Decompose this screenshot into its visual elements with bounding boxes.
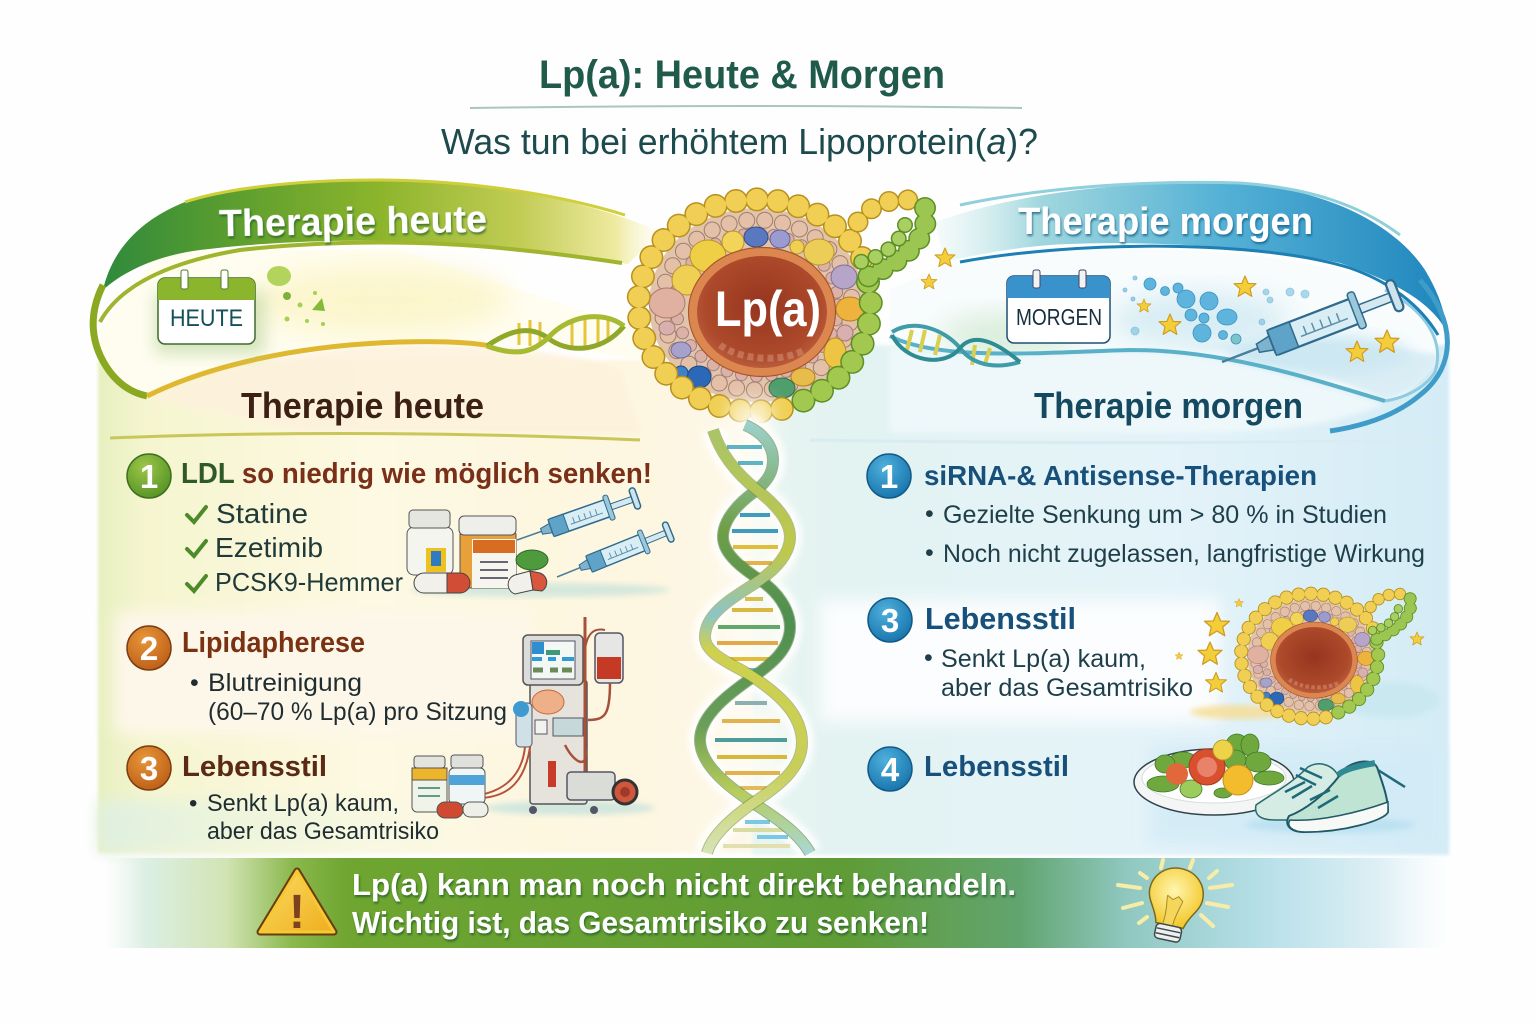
item 3 right: Lebensstil: • bbox=[924, 644, 933, 672]
item 1 right: siRNA: • bbox=[925, 539, 934, 567]
banner text bbox=[352, 867, 1016, 940]
item 3 left: Lebensstil bbox=[127, 746, 439, 845]
item 1 left: LDL senken: LDL so niedrig wie möglich senken! bbox=[181, 458, 652, 490]
banner: key message bbox=[105, 858, 1450, 948]
icon: warning triangle bbox=[260, 871, 334, 939]
item 1 right: siRNA: 1 bbox=[880, 458, 898, 495]
item 3 left: Lebensstil: • bbox=[189, 790, 197, 817]
list: medications bbox=[187, 498, 403, 597]
icon: apheresis machine bbox=[480, 617, 655, 815]
item 1 right: siRNA: Gezielte Senkung um > 80 % in Studien bbox=[943, 501, 1387, 529]
icon: mini Lp(a) particle with stars bbox=[1175, 594, 1440, 719]
item 2 left: Lipidapherese: Blutreinigung bbox=[208, 669, 362, 697]
item 1 left: LDL senken bbox=[127, 454, 652, 597]
item 1 right: siRNA bbox=[867, 454, 1425, 568]
item 1 right: siRNA: Noch nicht zugelassen, langfristige Wirkung bbox=[943, 540, 1425, 568]
headings: section titles: Therapie morgen bbox=[1034, 385, 1303, 426]
DNA helix bbox=[700, 425, 810, 853]
Lp(a) particle bbox=[638, 199, 926, 411]
icon: blue droplets bbox=[1123, 276, 1309, 344]
item 1 right: siRNA: • bbox=[925, 500, 934, 528]
icon: stars bbox=[921, 248, 1399, 361]
icon: small bottles and pills bbox=[412, 755, 488, 818]
item 2 left: Lipidapherese: (60–70 % Lp(a) pro Sitzung bbox=[208, 698, 507, 726]
panel: therapie morgen background bbox=[752, 249, 1449, 855]
panel: therapie heute background bbox=[98, 250, 753, 853]
item 4 right: Lebensstil: 4 bbox=[881, 751, 900, 788]
item 3 left: Lebensstil: Lebensstil bbox=[182, 751, 327, 783]
icon: medicine bottles, capsules and syringes bbox=[407, 485, 676, 597]
list: medications: Ezetimib bbox=[215, 532, 323, 563]
ribbon heading: Therapie morgen: Therapie morgen bbox=[1018, 201, 1313, 243]
icon: running shoes bbox=[1245, 762, 1415, 833]
item 2 left: Lipidapherese bbox=[127, 626, 507, 726]
icon: small dna left bbox=[487, 316, 624, 352]
item 1 right: siRNA: siRNA-& Antisense-Therapien bbox=[924, 460, 1317, 491]
subtitle: Was tun bei erhöhtem Lipoprotein(a)? bbox=[441, 121, 1038, 162]
item 3 right: Lebensstil: Lebensstil bbox=[925, 601, 1076, 636]
icon: calendar heute bbox=[155, 270, 265, 354]
item 4 right: Lebensstil bbox=[868, 747, 1069, 791]
item 2 left: Lipidapherese: • bbox=[190, 669, 199, 697]
icon: big syringe bbox=[1215, 276, 1406, 380]
item 3 right: Lebensstil bbox=[868, 598, 1193, 702]
icon: small dna right bbox=[892, 326, 1020, 365]
icon: warning triangle: ! bbox=[289, 886, 305, 939]
icon: salad plate bbox=[1134, 734, 1294, 815]
icon: green particles bbox=[267, 266, 325, 326]
label: Lp(a): Lp(a) bbox=[715, 281, 821, 337]
icon: calendar heute: HEUTE bbox=[170, 305, 243, 332]
list: medications: PCSK9-Hemmer bbox=[215, 567, 403, 597]
item 3 right: Lebensstil: 3 bbox=[881, 602, 899, 639]
ribbon: therapie morgen bbox=[890, 182, 1447, 431]
list: medications: Statine bbox=[216, 498, 308, 529]
icon: light bulb bbox=[1118, 860, 1232, 946]
ribbon heading: Therapie heute: Therapie heute bbox=[219, 199, 487, 245]
item 3 left: Lebensstil: aber das Gesamtrisiko bbox=[207, 818, 439, 845]
item 3 right: Lebensstil: aber das Gesamtrisiko bbox=[941, 674, 1193, 702]
icon: calendar morgen bbox=[1007, 270, 1110, 343]
item 3 left: Lebensstil: 3 bbox=[140, 750, 158, 787]
item 3 right: Lebensstil: Senkt Lp(a) kaum, bbox=[941, 645, 1146, 673]
item 2 left: Lipidapherese: 2 bbox=[140, 630, 158, 667]
item 2 left: Lipidapherese: Lipidapherese bbox=[182, 627, 365, 659]
banner text: Lp(a) kann man noch nicht direkt behandeln. bbox=[352, 867, 1016, 902]
banner text: Wichtig ist, das Gesamtrisiko zu senken! bbox=[352, 905, 929, 940]
title: Lp(a): Heute & Morgen bbox=[539, 53, 945, 97]
icon: calendar morgen: MORGEN bbox=[1016, 304, 1102, 330]
item 4 right: Lebensstil: Lebensstil bbox=[924, 751, 1069, 783]
item 3 left: Lebensstil: Senkt Lp(a) kaum, bbox=[207, 790, 399, 817]
item 1 left: LDL senken: 1 bbox=[140, 458, 158, 495]
ribbon: therapie heute bbox=[93, 180, 660, 396]
headings: section titles: Therapie heute bbox=[241, 385, 484, 426]
headings: section titles bbox=[110, 385, 1440, 442]
